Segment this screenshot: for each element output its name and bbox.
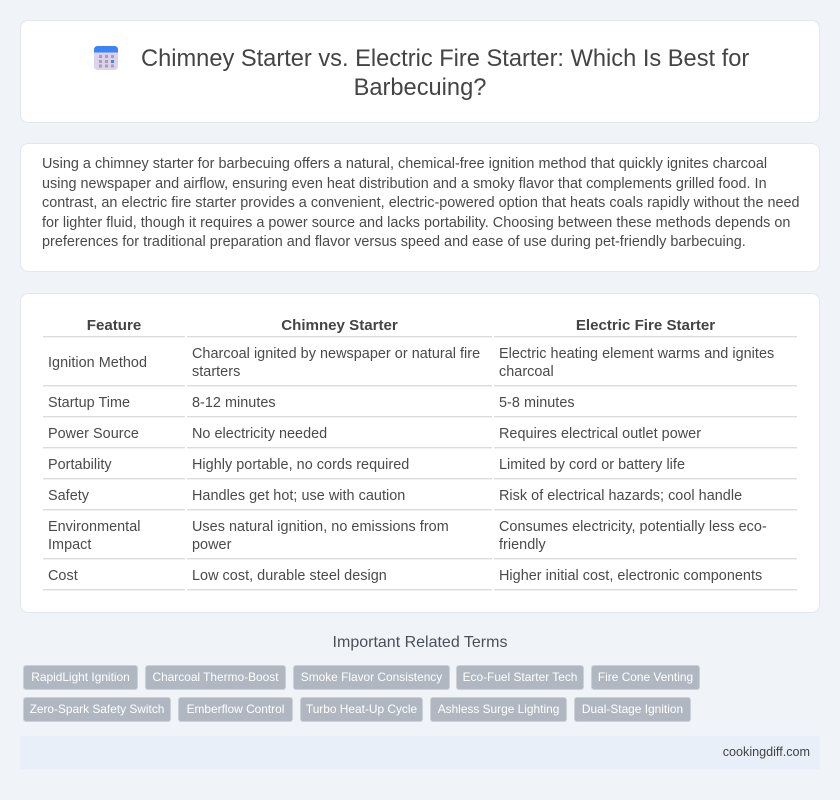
tag: Turbo Heat-Up Cycle xyxy=(306,702,417,716)
title xyxy=(141,46,749,101)
tag: Emberflow Control xyxy=(187,702,284,716)
intro text: Using a chimney starter for barbecuing offers a natural, chemical-free ignition method that quickly ignites charcoal xyxy=(42,156,767,172)
tag: Smoke Flavor Consistency xyxy=(301,670,442,684)
tag xyxy=(300,697,423,722)
Ignition Method, chimney: Charcoal ignited by newspaper or natural fire xyxy=(192,346,480,362)
tag: Eco-Fuel Starter Tech xyxy=(463,670,577,684)
footer source: cookingdiff.com xyxy=(723,745,810,759)
Power Source, chimney: No electricity needed xyxy=(192,426,327,442)
tag xyxy=(430,697,567,722)
panel: introduction xyxy=(20,143,820,272)
Environmental Impact, electric: friendly xyxy=(499,537,546,553)
row: Environmental Impact xyxy=(48,519,141,553)
Environmental Impact, electric: Consumes electricity, potentially less eco- xyxy=(499,519,767,535)
tag xyxy=(23,697,171,722)
Ignition Method, chimney xyxy=(192,346,480,380)
intro text: preferences for traditional preparation and flavor versus speed and ease of use during pet-friendly barbecuing. xyxy=(42,234,746,250)
intro text: for lighter fluid, though it requires a power source and lacks portability. Choosing between these methods depends on xyxy=(42,214,790,230)
Environmental Impact, electric xyxy=(499,519,767,553)
tag: Ashless Surge Lighting xyxy=(438,702,559,716)
Environmental Impact, chimney: Uses natural ignition, no emissions from xyxy=(192,519,449,535)
tag: Dual-Stage Ignition xyxy=(582,702,683,716)
Portability, electric: Limited by cord or battery life xyxy=(499,457,685,473)
footer bar xyxy=(20,736,820,769)
Portability, chimney: Highly portable, no cords required xyxy=(192,457,409,473)
tag: RapidLight Ignition xyxy=(31,670,130,684)
row: Environmental Impact: Environmental xyxy=(48,519,141,535)
title: Barbecuing? xyxy=(354,75,486,101)
related term tags xyxy=(23,665,700,722)
row: Portability: Portability xyxy=(48,457,112,473)
related terms heading: Important Related Terms xyxy=(333,634,507,651)
Cost, chimney: Low cost, durable steel design xyxy=(192,568,387,584)
tag xyxy=(591,665,700,690)
header panel xyxy=(20,20,820,123)
row: Cost: Cost xyxy=(48,568,78,584)
tag xyxy=(293,665,450,690)
tag xyxy=(145,665,286,690)
Safety, chimney: Handles get hot; use with caution xyxy=(192,488,405,504)
Startup Time, electric: 5-8 minutes xyxy=(499,395,575,411)
tag xyxy=(23,665,138,690)
Ignition Method, electric: charcoal xyxy=(499,364,554,380)
row: Startup Time: Startup Time xyxy=(48,395,130,411)
column header: Chimney Starter: Chimney Starter xyxy=(281,317,398,334)
row: Safety: Safety xyxy=(48,488,89,504)
Safety, electric: Risk of electrical hazards; cool handle xyxy=(499,488,742,504)
Ignition Method, electric: Electric heating element warms and ignites xyxy=(499,346,774,362)
column header: Electric Fire Starter: Electric Fire Starter xyxy=(576,317,715,334)
panel: comparison table xyxy=(20,293,820,613)
intro text: using newspaper and airflow, ensuring even heat distribution and a smoky flavor that complements grilled food. In xyxy=(42,176,767,192)
Environmental Impact, chimney: power xyxy=(192,537,231,553)
Ignition Method, electric xyxy=(499,346,774,380)
row: Power Source: Power Source xyxy=(48,426,139,442)
Ignition Method, chimney: starters xyxy=(192,364,240,380)
tag: Zero-Spark Safety Switch xyxy=(30,702,164,716)
tag xyxy=(178,697,293,722)
tag: Fire Cone Venting xyxy=(598,670,693,684)
Cost, electric: Higher initial cost, electronic components xyxy=(499,568,762,584)
Environmental Impact, chimney xyxy=(192,519,449,553)
Power Source, electric: Requires electrical outlet power xyxy=(499,426,701,442)
intro text: contrast, an electric fire starter provides a convenient, electric-powered option that heats coals rapidly without the need xyxy=(42,195,800,211)
tag: Charcoal Thermo-Boost xyxy=(152,670,278,684)
tag xyxy=(574,697,691,722)
title: Chimney Starter vs. Electric Fire Starter: Which Is Best for xyxy=(141,46,749,72)
tag xyxy=(456,665,584,690)
column header: Feature: Feature xyxy=(87,317,141,334)
row: Environmental Impact: Impact xyxy=(48,537,91,553)
intro text xyxy=(42,156,800,250)
icon: calendar xyxy=(94,46,118,70)
Startup Time, chimney: 8-12 minutes xyxy=(192,395,276,411)
row: Ignition Method: Ignition Method xyxy=(48,355,147,371)
